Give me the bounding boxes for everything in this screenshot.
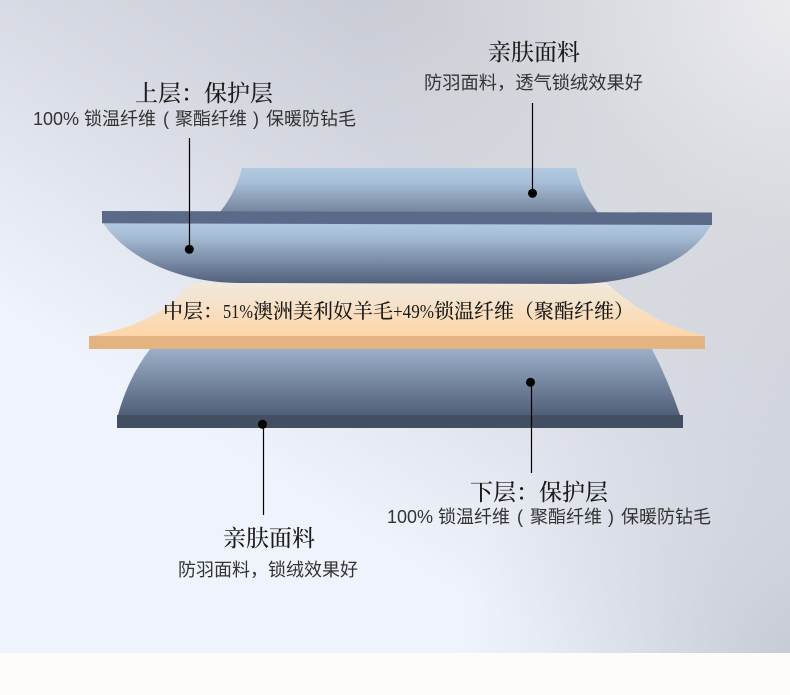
leader line and dot: top skin fabric (528, 103, 537, 198)
heading: bottom skin fabric (178, 526, 358, 580)
leader line and dot: upper layer (185, 138, 194, 254)
upper layer: protective bowl (103, 223, 711, 284)
description: lower layer: 锁温纤维 (438, 507, 510, 527)
description: upper layer: 100% (33, 109, 79, 129)
description: lower layer: 100% (387, 507, 433, 527)
middle layer label: +49% (393, 301, 434, 323)
description: upper layer: 聚酯纤维 (175, 109, 247, 129)
bottom strip (0, 653, 790, 695)
description: lower layer: 聚酯纤维 (530, 507, 602, 527)
middle layer label: 中层： (163, 300, 223, 323)
upper layer: top skin pad (220, 168, 598, 213)
middle layer: wool fill (90, 283, 705, 336)
description: lower layer: ( (517, 507, 523, 527)
description: upper layer: ( (163, 109, 169, 129)
heading: lower layer: 下层：保护层 (470, 480, 609, 505)
middle layer label: （ (514, 301, 534, 323)
middle layer label: 聚酯纤维 (534, 300, 614, 323)
heading: top skin fabric (424, 40, 643, 93)
leader line and dot: lower layer (526, 378, 535, 473)
heading: upper layer (33, 81, 356, 129)
heading: lower layer (387, 480, 711, 527)
upper layer: band (102, 211, 712, 225)
leader line and dot: bottom skin fabric (258, 420, 267, 515)
description: upper layer: 锁温纤维 (84, 109, 156, 129)
lower layer: skin fabric band (117, 415, 683, 428)
description: top skin fabric: 防羽面料，透气锁绒效果好 (424, 72, 643, 93)
description: upper layer: 保暖防钻毛 (266, 109, 356, 129)
middle layer: base band (89, 336, 705, 349)
middle layer label: 澳洲美利奴羊毛 (253, 300, 393, 323)
description: lower layer: 保暖防钻毛 (621, 507, 711, 527)
description: bottom skin fabric: 防羽面料，锁绒效果好 (178, 560, 358, 580)
middle layer label: 锁温纤维 (434, 300, 514, 323)
description: lower layer: ) (608, 507, 614, 527)
middle layer label: ） (614, 301, 634, 323)
heading: upper layer: 上层：保护层 (135, 81, 274, 106)
heading: bottom skin fabric: 亲肤面料 (223, 526, 315, 551)
heading: top skin fabric: 亲肤面料 (488, 40, 580, 65)
middle layer label: 51% (223, 301, 253, 323)
lower layer: protective pad (118, 349, 680, 415)
description: upper layer: ) (253, 109, 259, 129)
